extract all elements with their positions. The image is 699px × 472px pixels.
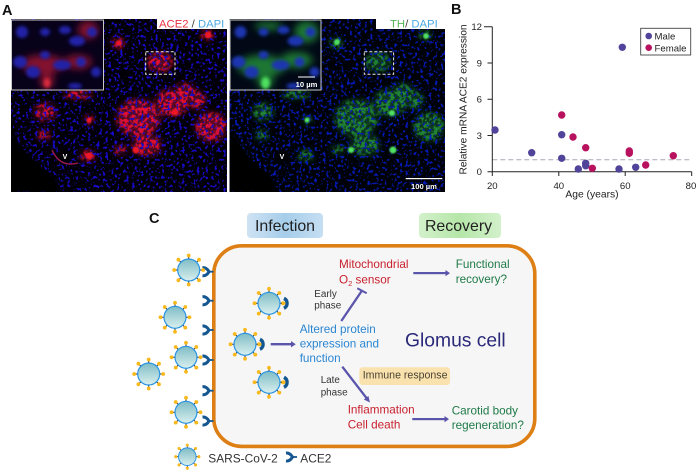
arrow: late phase — [342, 367, 370, 402]
functional recovery text: Functional — [456, 258, 510, 271]
dashed region of interest — [146, 52, 175, 74]
arrow: inflammation to regeneration — [412, 416, 449, 422]
chart: ACE2 expression vs age — [459, 22, 696, 200]
axis tick labels: 0 — [477, 167, 482, 178]
legend — [641, 28, 691, 55]
O2 sensor text: O — [339, 273, 348, 286]
scale bar 10 µm: 10 µm — [296, 80, 318, 89]
arrow: sensor to recovery — [413, 270, 450, 276]
axis tick labels: 20 — [487, 181, 498, 192]
axes — [484, 27, 692, 176]
data points: male — [491, 44, 639, 173]
y axis title: Relative mRNA ACE2 expression — [459, 24, 470, 175]
viruses inside cell with bound ACE2 — [229, 287, 287, 399]
panel A: TH / DAPI micrograph — [230, 19, 446, 192]
altered protein text: Altered protein — [300, 323, 376, 336]
axis tick labels: 60 — [620, 181, 631, 192]
receptors on membrane — [202, 268, 214, 425]
legend: SARS-CoV-2 and ACE2 — [174, 444, 332, 470]
axis tick labels: 12 — [471, 22, 482, 33]
inflammation text: Inflammation — [348, 403, 415, 416]
inset: ACE2 zoom — [12, 20, 104, 90]
vessel label: V — [280, 154, 285, 161]
altered protein text: function — [300, 352, 341, 365]
late phase label: phase — [321, 388, 348, 399]
inset: TH zoom — [230, 20, 321, 90]
panel: glomus cell — [214, 246, 535, 446]
vessel label: V — [63, 154, 68, 161]
panel label B: B — [451, 2, 461, 18]
functional recovery text: recovery? — [456, 273, 508, 286]
early phase label: Early — [314, 289, 337, 300]
legend: SARS-CoV-2 and ACE2: ACE2 — [300, 451, 332, 465]
scale bar 100 µm: 100 µm — [411, 182, 437, 191]
legend: Female — [654, 43, 686, 54]
O2 sensor text: 2 — [348, 279, 352, 288]
axis tick labels — [471, 22, 696, 192]
axis tick labels: 6 — [477, 94, 482, 106]
altered protein text: expression and — [300, 338, 379, 351]
inflammation text: Cell death — [348, 418, 400, 431]
arrow: virus to altered protein — [271, 341, 296, 347]
panel label A: A — [2, 3, 13, 19]
heading: Infection: Infection — [255, 218, 315, 235]
label: TH/DAPI: TH/ DAPI — [390, 19, 438, 31]
heading: Infection — [247, 213, 323, 238]
panel A: ACE2 / DAPI micrograph — [11, 19, 227, 192]
legend: SARS-CoV-2 and ACE2: SARS-CoV-2 — [208, 451, 278, 465]
mitochondrial sensor text: Mitochondrial — [339, 258, 409, 271]
heading: Recovery — [419, 213, 501, 238]
regeneration text: regeneration? — [452, 419, 524, 432]
x axis title: Age (years) — [565, 190, 619, 200]
early phase label: phase — [314, 300, 342, 312]
dashed region of interest — [364, 52, 394, 74]
axis tick labels: 40 — [553, 181, 564, 192]
immune response label: Immune response — [363, 369, 448, 381]
inhibition arrow: early phase — [341, 288, 367, 321]
axis tick labels: 9 — [477, 58, 482, 69]
heading: Recovery: Recovery — [425, 218, 492, 235]
data points: female — [558, 111, 677, 172]
immune response label — [359, 367, 450, 385]
scale bar 100 µm — [406, 178, 442, 191]
regeneration text: Carotid body — [452, 404, 518, 417]
O2 sensor text: sensor — [352, 273, 391, 286]
axis tick labels: 80 — [686, 181, 696, 192]
cell label: Glomus cell — [405, 331, 506, 352]
legend: Male — [654, 32, 675, 43]
label: ACE2/DAPI: ACE2 / DAPI — [159, 19, 224, 31]
panel label C: C — [149, 211, 160, 227]
reference line — [492, 159, 692, 161]
viruses outside cell — [132, 254, 205, 429]
late phase label: Late — [321, 375, 340, 386]
axis tick labels: 3 — [477, 131, 482, 142]
